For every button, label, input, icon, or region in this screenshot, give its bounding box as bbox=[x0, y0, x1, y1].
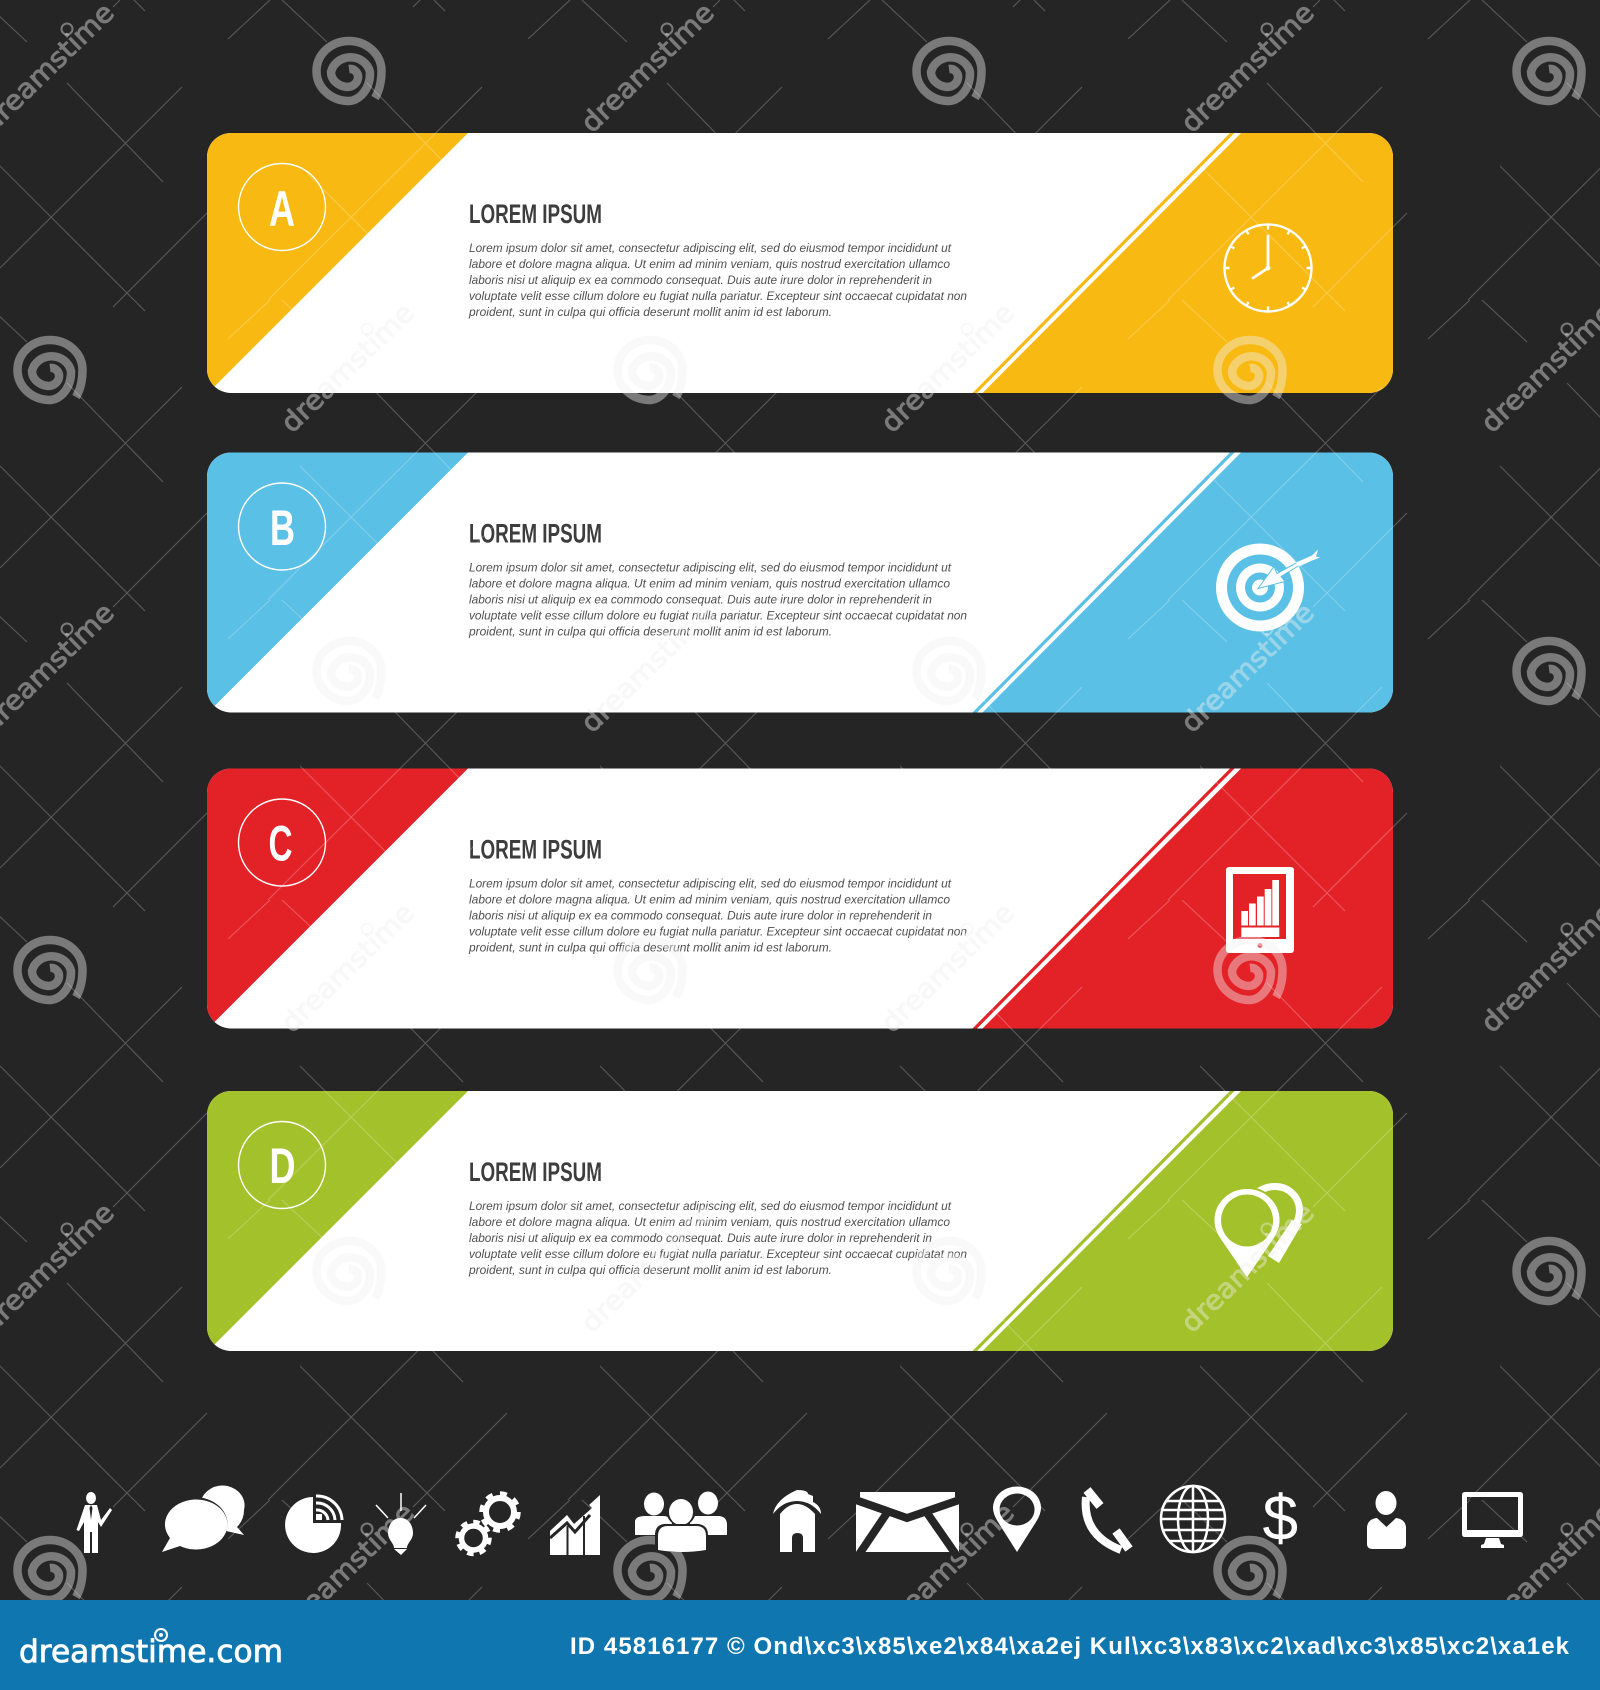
body text: C: voluptate velit esse cillum dolore eu fugiat nulla pariatur. Excepteur sint occaecat cupidatat non bbox=[469, 924, 967, 938]
body text: C: proident, sunt in culpa qui officia deserunt mollit anim id est laborum. bbox=[468, 940, 832, 954]
badge: C: C bbox=[268, 816, 292, 872]
watermark: dreamstime text: dreamstime bbox=[1175, 1197, 1321, 1339]
watermark: dreamstime text: dreamstime bbox=[275, 897, 421, 1039]
body text: A bbox=[468, 241, 967, 319]
watermark: dreamstime text: dreamstime bbox=[275, 1497, 421, 1639]
heading: D: LOREM IPSUM bbox=[469, 1157, 602, 1187]
body text: B bbox=[468, 560, 967, 638]
body text: B: voluptate velit esse cillum dolore eu fugiat nulla pariatur. Excepteur sint occaecat cupidatat non bbox=[469, 608, 967, 622]
body text: C: laboris nisi ut aliquip ex ea commodo consequat. Duis aute irure dolor in reprehenderit in bbox=[469, 908, 932, 922]
footer bar bbox=[0, 1600, 1600, 1690]
icon: tablet chart bbox=[1226, 867, 1294, 953]
heading: B: LOREM IPSUM bbox=[469, 518, 602, 548]
icon: presenter bbox=[76, 1492, 112, 1553]
icon: clock bbox=[1224, 224, 1312, 312]
body text: D: Lorem ipsum dolor sit amet, consectetur adipiscing elit, sed do eiusmod tempor incididunt ut bbox=[469, 1199, 952, 1213]
icon: dollar: $ bbox=[1262, 1482, 1298, 1554]
icon: location pin bbox=[993, 1486, 1041, 1552]
watermark: dreamstime text: dreamstime bbox=[875, 297, 1021, 439]
badge: C bbox=[238, 799, 326, 886]
badge: A: A bbox=[269, 181, 295, 237]
panel: D bbox=[207, 1091, 1393, 1352]
icon: house bbox=[773, 1490, 821, 1552]
icon: growth chart bbox=[550, 1495, 600, 1555]
icon: monitor bbox=[1462, 1492, 1523, 1548]
body text: B: laboris nisi ut aliquip ex ea commodo consequat. Duis aute irure dolor in reprehenderit in bbox=[469, 592, 932, 606]
icon row bbox=[76, 1482, 1523, 1556]
badge: D: D bbox=[270, 1138, 296, 1194]
heading: C: LOREM IPSUM bbox=[469, 834, 602, 864]
footer logo: dreamstime.com: dreamstime.com bbox=[19, 1634, 283, 1670]
icon: envelope bbox=[850, 1492, 965, 1556]
heading: A: LOREM IPSUM bbox=[469, 199, 602, 229]
badge: D bbox=[238, 1122, 326, 1208]
badge: B: B bbox=[270, 500, 295, 556]
icon: telephone bbox=[1086, 1490, 1129, 1550]
icon: pie chart with wifi bbox=[285, 1496, 342, 1553]
icon: user bbox=[1367, 1491, 1406, 1549]
body text: B: Lorem ipsum dolor sit amet, consectetur adipiscing elit, sed do eiusmod tempor incididunt ut bbox=[469, 560, 952, 574]
watermark: dreamstime text: dreamstime bbox=[1175, 597, 1321, 739]
body text: A: labore et dolore magna aliqua. Ut enim ad minim veniam, quis nostrud exercitation ullamco bbox=[469, 257, 950, 271]
body text: C bbox=[468, 876, 967, 954]
icon: globe bbox=[1161, 1486, 1225, 1552]
panel: A bbox=[207, 133, 1393, 394]
panel: C bbox=[207, 768, 1393, 1030]
icon: team bbox=[635, 1492, 727, 1552]
panel: B bbox=[207, 452, 1393, 714]
body text: D bbox=[468, 1199, 967, 1277]
body text: A: voluptate velit esse cillum dolore eu fugiat nulla pariatur. Excepteur sint occaecat cupidatat non bbox=[469, 289, 967, 303]
badge: B bbox=[238, 483, 326, 570]
body text: D: labore et dolore magna aliqua. Ut enim ad minim veniam, quis nostrud exercitation ullamco bbox=[469, 1215, 950, 1229]
body text: D: voluptate velit esse cillum dolore eu fugiat nulla pariatur. Excepteur sint occaecat cupidatat non bbox=[469, 1247, 967, 1261]
watermark: dreamstime text: dreamstime bbox=[875, 897, 1021, 1039]
watermark: dreamstime text: dreamstime bbox=[875, 1497, 1021, 1639]
watermark: dreamstime text: dreamstime bbox=[275, 297, 421, 439]
body text: D: proident, sunt in culpa qui officia deserunt mollit anim id est laborum. bbox=[468, 1263, 832, 1277]
footer credit text: ID 45816177 © Ond\xc3\x85\xe2\x84\xa2ej Kul\xc3\x83\xc2\xad\xc3\x85\xc2\xa1ek bbox=[570, 1633, 1570, 1660]
badge: A bbox=[238, 164, 326, 250]
body text: D: laboris nisi ut aliquip ex ea commodo consequat. Duis aute irure dolor in reprehenderit in bbox=[469, 1231, 932, 1245]
watermark: dreamstime text: dreamstime bbox=[1175, 0, 1321, 139]
body text: B: proident, sunt in culpa qui officia deserunt mollit anim id est laborum. bbox=[468, 624, 832, 638]
body text: A: proident, sunt in culpa qui officia deserunt mollit anim id est laborum. bbox=[468, 305, 832, 319]
icon: map pins bbox=[1213, 1186, 1302, 1279]
body text: C: Lorem ipsum dolor sit amet, consectetur adipiscing elit, sed do eiusmod tempor incididunt ut bbox=[469, 876, 952, 890]
body text: A: laboris nisi ut aliquip ex ea commodo consequat. Duis aute irure dolor in reprehenderit in bbox=[469, 273, 932, 287]
icon: speech bubbles bbox=[160, 1486, 245, 1552]
watermark: dreamstime text: dreamstime bbox=[575, 597, 721, 739]
icon: target bbox=[1216, 544, 1320, 632]
body text: C: labore et dolore magna aliqua. Ut enim ad minim veniam, quis nostrud exercitation ullamco bbox=[469, 892, 950, 906]
body text: B: labore et dolore magna aliqua. Ut enim ad minim veniam, quis nostrud exercitation ullamco bbox=[469, 576, 950, 590]
icon: light bulb bbox=[376, 1493, 426, 1555]
icon: gears bbox=[458, 1494, 518, 1554]
body text: A: Lorem ipsum dolor sit amet, consectetur adipiscing elit, sed do eiusmod tempor incididunt ut bbox=[469, 241, 952, 255]
watermark: dreamstime text: dreamstime bbox=[575, 0, 721, 139]
watermark: dreamstime text: dreamstime bbox=[575, 1197, 721, 1339]
